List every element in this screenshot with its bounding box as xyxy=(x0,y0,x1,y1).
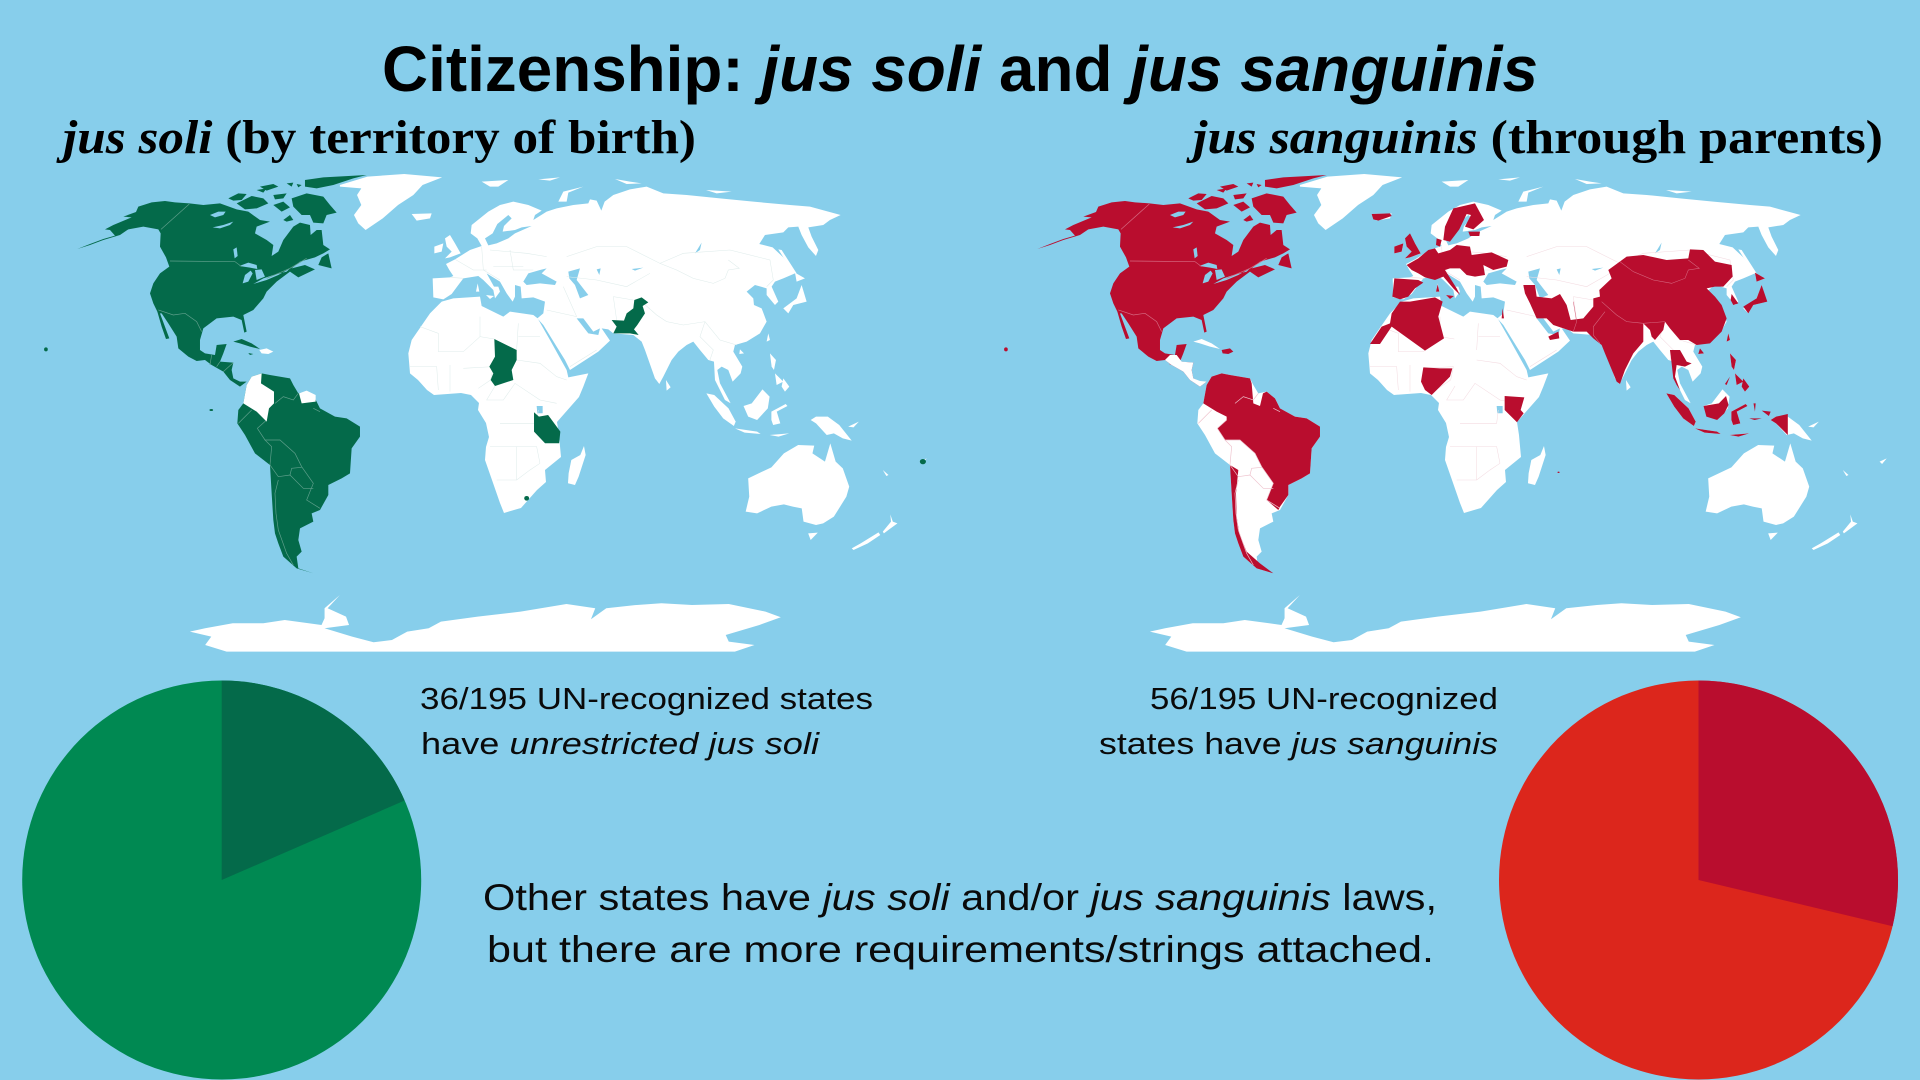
text: jus sanguinis statistic: states have jus sanguinis xyxy=(1099,726,1498,761)
red countries of Eurasia and Africa xyxy=(1370,203,1767,422)
slice: 56 of 195 xyxy=(1698,680,1898,926)
text: jus sanguinis statistic xyxy=(1099,681,1498,761)
pie chart: jus soli share xyxy=(22,680,421,1080)
red South American countries xyxy=(1203,373,1320,573)
heading: jus soli: jus soli (by territory of birth) xyxy=(56,111,696,164)
map: jus sanguinis world map xyxy=(1004,174,1887,652)
Caribbean and small green states xyxy=(233,339,273,355)
slice: 36 of 195 xyxy=(222,680,405,880)
text: jus soli statistic xyxy=(420,681,873,761)
text: other states note: Other states have jus soli and/or jus sanguinis laws, xyxy=(483,877,1437,918)
red lines and inner borders over China xyxy=(1573,260,1699,343)
green countries of the Old World xyxy=(489,297,648,386)
white countries in the Americas xyxy=(243,373,316,422)
heading: jus sanguinis: jus sanguinis (through parents) xyxy=(1185,111,1883,164)
white Central America and Caribbean xyxy=(1165,339,1233,387)
red Indonesia xyxy=(1557,393,1788,473)
map: jus soli world map xyxy=(44,174,927,652)
pie chart: jus sanguinis share xyxy=(1499,680,1898,1080)
small red islands xyxy=(1004,347,1008,351)
text: jus soli statistic: have unrestricted jus soli xyxy=(421,726,820,761)
text: other states note: but there are more requirements/strings attached. xyxy=(487,929,1434,970)
text: jus sanguinis statistic: 56/195 UN-recognized xyxy=(1150,681,1498,716)
text: other states note xyxy=(483,877,1437,970)
title: Citizenship: jus soli and jus sanguinis xyxy=(382,33,1538,105)
text: jus soli statistic: 36/195 UN-recognized states xyxy=(420,681,873,716)
